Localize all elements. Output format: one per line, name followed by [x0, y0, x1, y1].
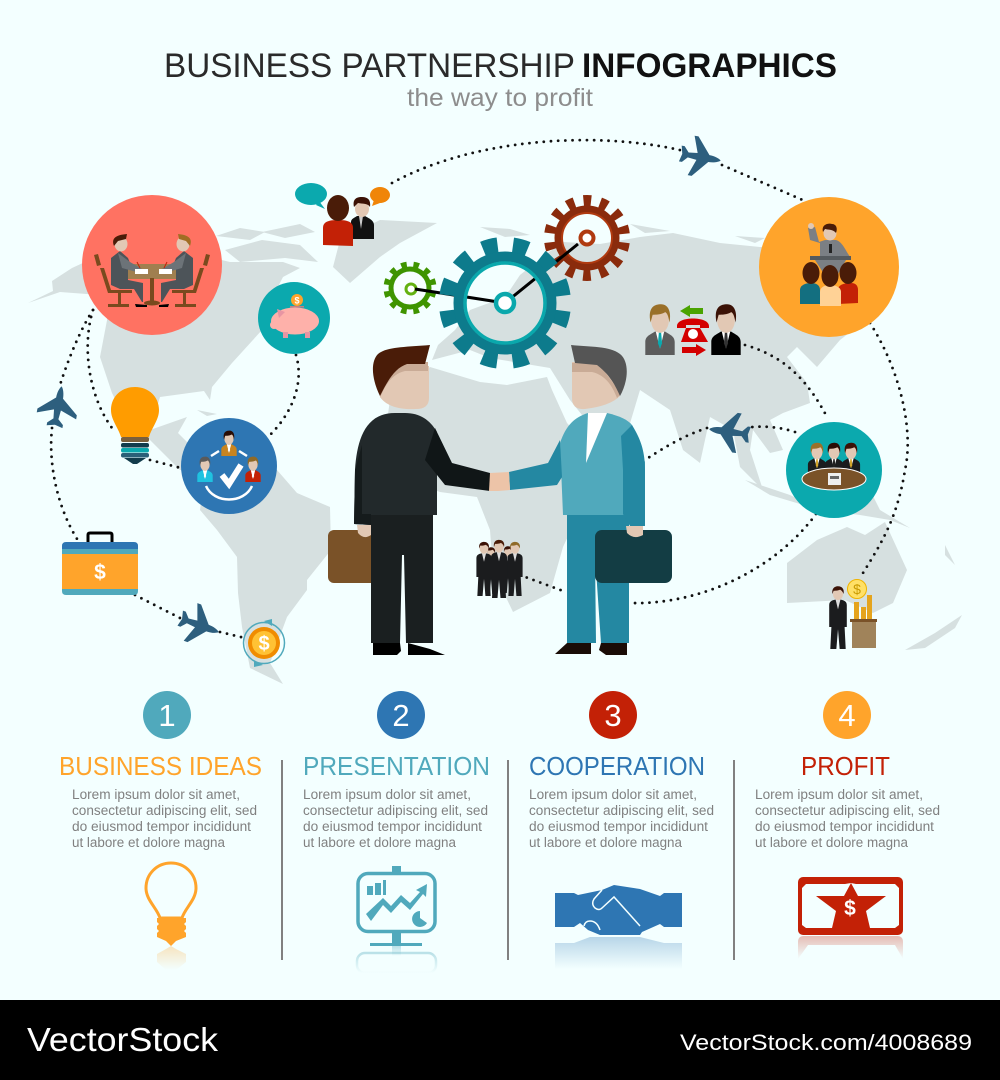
gears — [384, 197, 628, 368]
businessman left — [328, 345, 490, 655]
gear: teal big — [440, 238, 570, 368]
pants — [567, 512, 629, 643]
icon: coin with arrows: $ — [258, 633, 270, 655]
head — [379, 366, 429, 409]
businessman right — [489, 345, 672, 655]
icon: star banknote — [798, 877, 903, 959]
icon: speaker and audience circle — [759, 197, 899, 337]
plane 4 — [173, 599, 226, 651]
icon: teamwork circle — [181, 418, 277, 514]
number badge 4 — [823, 691, 871, 739]
gear: rust — [546, 197, 628, 279]
jacket — [354, 413, 437, 525]
body text: Lorem ipsum dolor sit amet, — [755, 787, 923, 802]
body text — [755, 787, 940, 850]
heading: PROFIT — [801, 751, 890, 781]
plane 1 — [35, 383, 81, 430]
column 4: profit — [755, 691, 940, 959]
number badge 1: 1 — [158, 698, 176, 733]
icon: meeting at table circle — [82, 195, 222, 335]
gear: green small — [384, 262, 436, 314]
icon: man with coins: $ — [853, 581, 861, 597]
icon: two people talking — [295, 183, 390, 246]
icon: money briefcase — [62, 533, 138, 595]
column 3: cooperation — [529, 691, 714, 969]
body text: consectetur adipiscing elit, sed — [303, 803, 488, 818]
icon: outline bulb — [146, 863, 196, 970]
body text — [72, 787, 257, 850]
body text — [303, 787, 488, 850]
connecting shafts — [415, 244, 578, 303]
column dividers — [282, 760, 734, 960]
body text: do eiusmod tempor incididunt — [72, 819, 251, 834]
heading: COOPERATION — [529, 751, 705, 781]
title: INFOGRAPHICS — [582, 47, 837, 85]
icon: piggy bank circle — [258, 282, 330, 354]
number badge 2 — [377, 691, 425, 739]
heading: BUSINESS IDEAS — [59, 751, 262, 781]
body text: consectetur adipiscing elit, sed — [529, 803, 714, 818]
body text: do eiusmod tempor incididunt — [303, 819, 482, 834]
number badge 3: 3 — [604, 698, 622, 733]
dotted route lines — [51, 140, 908, 638]
body text — [529, 787, 714, 850]
briefcase teal — [595, 530, 672, 583]
icon: handshake — [555, 885, 682, 969]
body text: Lorem ipsum dolor sit amet, — [303, 787, 471, 802]
body text: Lorem ipsum dolor sit amet, — [529, 787, 697, 802]
jacket — [560, 413, 645, 515]
icon: star banknote: $ — [844, 897, 856, 920]
world map — [28, 220, 962, 684]
column 2: presentation — [303, 691, 490, 973]
footer url text: VectorStock.com/4008689 — [680, 1030, 972, 1055]
number badge 1 — [143, 691, 191, 739]
number badge 3 — [589, 691, 637, 739]
icon: group of businessmen — [476, 540, 523, 598]
body text: ut labore et dolore magna — [755, 835, 908, 850]
number badge 2: 2 — [392, 698, 410, 733]
body text: do eiusmod tempor incididunt — [529, 819, 708, 834]
title — [164, 47, 837, 85]
icon: team at oval table circle — [786, 422, 882, 518]
body text: ut labore et dolore magna — [529, 835, 682, 850]
body text: ut labore et dolore magna — [303, 835, 456, 850]
icon: man with coins — [829, 580, 877, 649]
column 1: business ideas — [59, 691, 262, 970]
title: BUSINESS PARTNERSHIP — [164, 47, 575, 85]
plane 3 — [706, 409, 753, 455]
body text: consectetur adipiscing elit, sed — [72, 803, 257, 818]
body text: ut labore et dolore magna — [72, 835, 225, 850]
footer bar — [0, 1000, 1000, 1080]
icon: presentation board — [357, 866, 436, 973]
pants — [371, 512, 433, 643]
briefcase brown — [328, 530, 378, 583]
plane 2 — [677, 134, 724, 180]
icon: light bulb — [111, 387, 159, 464]
head — [572, 362, 620, 409]
icon: money briefcase: $ — [94, 561, 106, 584]
footer logo text: VectorStock — [27, 1021, 219, 1058]
body text: Lorem ipsum dolor sit amet, — [72, 787, 240, 802]
body text: consectetur adipiscing elit, sed — [755, 803, 940, 818]
icon: phone call between people — [645, 304, 741, 356]
icon: coin with arrows — [244, 619, 284, 667]
subtitle: the way to profit — [407, 84, 593, 112]
body text: do eiusmod tempor incididunt — [755, 819, 934, 834]
heading: PRESENTATION — [303, 751, 490, 781]
number badge 4: 4 — [838, 698, 856, 733]
icon: piggy bank circle: $ — [294, 296, 300, 306]
